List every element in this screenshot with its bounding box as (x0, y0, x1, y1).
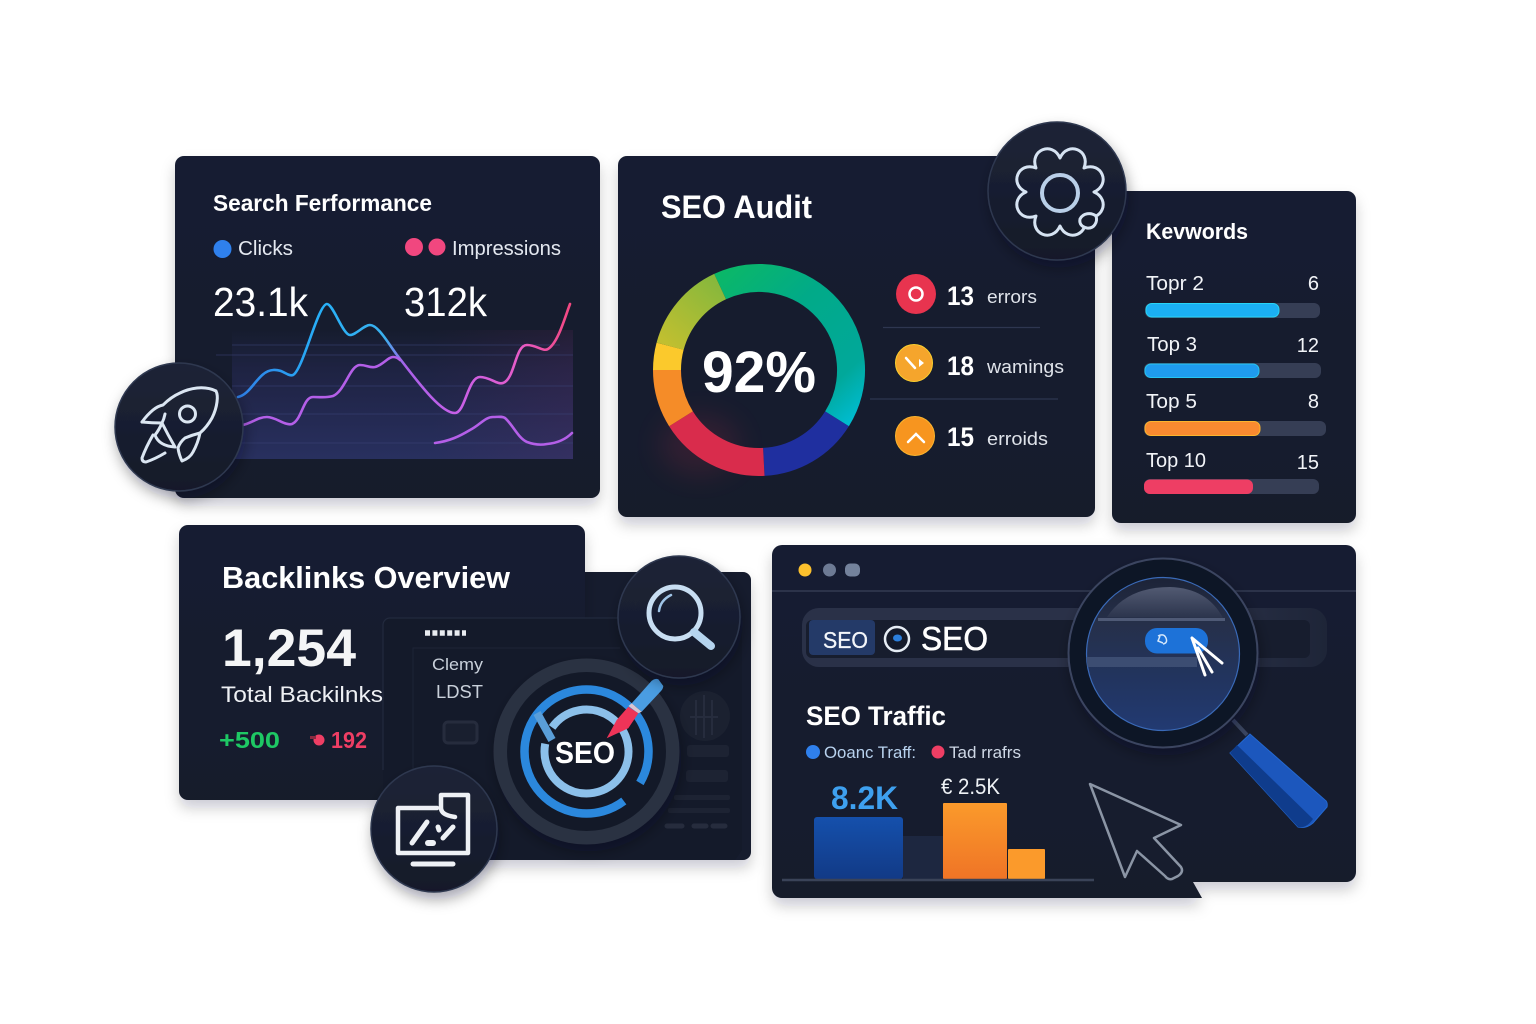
donut value: 92% (702, 340, 816, 405)
icon: arrow cursor (1090, 784, 1182, 879)
keyword row: top 3: 12 (1297, 335, 1319, 357)
icon: rocket badge (115, 363, 243, 491)
legend: clicks (214, 238, 293, 260)
label: total backlinks: Total Backilnks (221, 682, 383, 707)
search chip label: SEO (823, 627, 868, 653)
status row: warnings: wamings (986, 357, 1064, 377)
panel: keywords (1112, 191, 1356, 523)
legend: impressions (405, 238, 561, 260)
status row: warnings: 18 (947, 351, 974, 381)
panel: seo target inner window (383, 618, 742, 860)
chart: score donut (660, 278, 851, 475)
panel: seo audit (618, 156, 1095, 517)
keyword row: top 3 (1144, 334, 1321, 378)
keyword row: top 2: Topr 2 (1146, 273, 1204, 295)
panel: seo target background (480, 572, 751, 860)
value: paid: € 2.5K (941, 774, 1000, 799)
bar chart: traffic (782, 774, 1094, 880)
status row: errors: 13 (947, 281, 974, 311)
keyword row: top 10: 15 (1297, 452, 1319, 474)
line chart: clicks and impressions (216, 304, 573, 459)
small placeholder icon (444, 722, 477, 743)
metric: impressions value: 312k (404, 279, 487, 325)
keyword row: top 10: Top 10 (1146, 450, 1206, 472)
keyword row: top 10 (1144, 450, 1319, 494)
dots row (425, 630, 466, 636)
heading: search performance: Search Ferformance (213, 190, 432, 216)
legend: paid traffic: Tad rrafrs (949, 743, 1021, 762)
keyword row: top 5 (1144, 391, 1326, 436)
keyword row: top 5: 8 (1308, 391, 1319, 413)
legend: organic traffic: Ooanc Traff: (824, 743, 916, 762)
SEO dashboard infographic (108, 120, 1362, 912)
keyword row: top 3: Top 3 (1147, 334, 1197, 356)
keyword row: top 2 (1145, 273, 1320, 318)
heading: seo traffic: SEO Traffic (806, 701, 946, 731)
icon: magnifying glass (1068, 558, 1327, 828)
faint side widgets (667, 691, 730, 826)
metric: total backlinks: 1,254 (222, 619, 357, 678)
heading: backlinks overview: Backlinks Overview (222, 560, 511, 595)
status row: erroids: erroids (987, 429, 1048, 449)
target label: SEO (555, 735, 615, 770)
panel: seo traffic browser window (772, 545, 1356, 898)
window controls (798, 564, 860, 576)
label: ldst: LDST (436, 682, 483, 702)
icon: monitor badge (371, 766, 497, 892)
metric: lost links: 192 (331, 727, 367, 753)
legend: impressions: Impressions (452, 238, 561, 260)
icon: gear badge (988, 122, 1126, 260)
heading: keywords: Kevwords (1146, 219, 1248, 244)
status row: errors (896, 274, 1037, 314)
pencil needle (607, 679, 663, 738)
icon: seo target (494, 658, 680, 844)
search text: SEO (921, 620, 988, 657)
panel: backlinks overview (179, 525, 585, 800)
search ring icon (885, 627, 909, 651)
metric: clicks value: 23.1k (213, 279, 308, 325)
legend: clicks: Clicks (238, 238, 293, 260)
status row: errors: errors (987, 287, 1037, 307)
lens pill button (1145, 628, 1222, 675)
metric: lost links (310, 727, 367, 753)
label: clemy: Clemy (432, 655, 484, 674)
heading: seo audit: SEO Audit (661, 189, 812, 225)
metric: gained links: +500 (219, 727, 280, 753)
status row: erroids (896, 416, 1048, 456)
keyword row: top 5: Top 5 (1146, 391, 1197, 413)
status row: erroids: 15 (947, 422, 974, 452)
icon: magnifier badge (618, 556, 740, 678)
panel: search performance (175, 156, 600, 498)
keyword row: top 2: 6 (1308, 273, 1319, 295)
value: organic: 8.2K (831, 780, 898, 816)
status row: warnings (896, 344, 1064, 382)
search bar (802, 608, 1327, 667)
